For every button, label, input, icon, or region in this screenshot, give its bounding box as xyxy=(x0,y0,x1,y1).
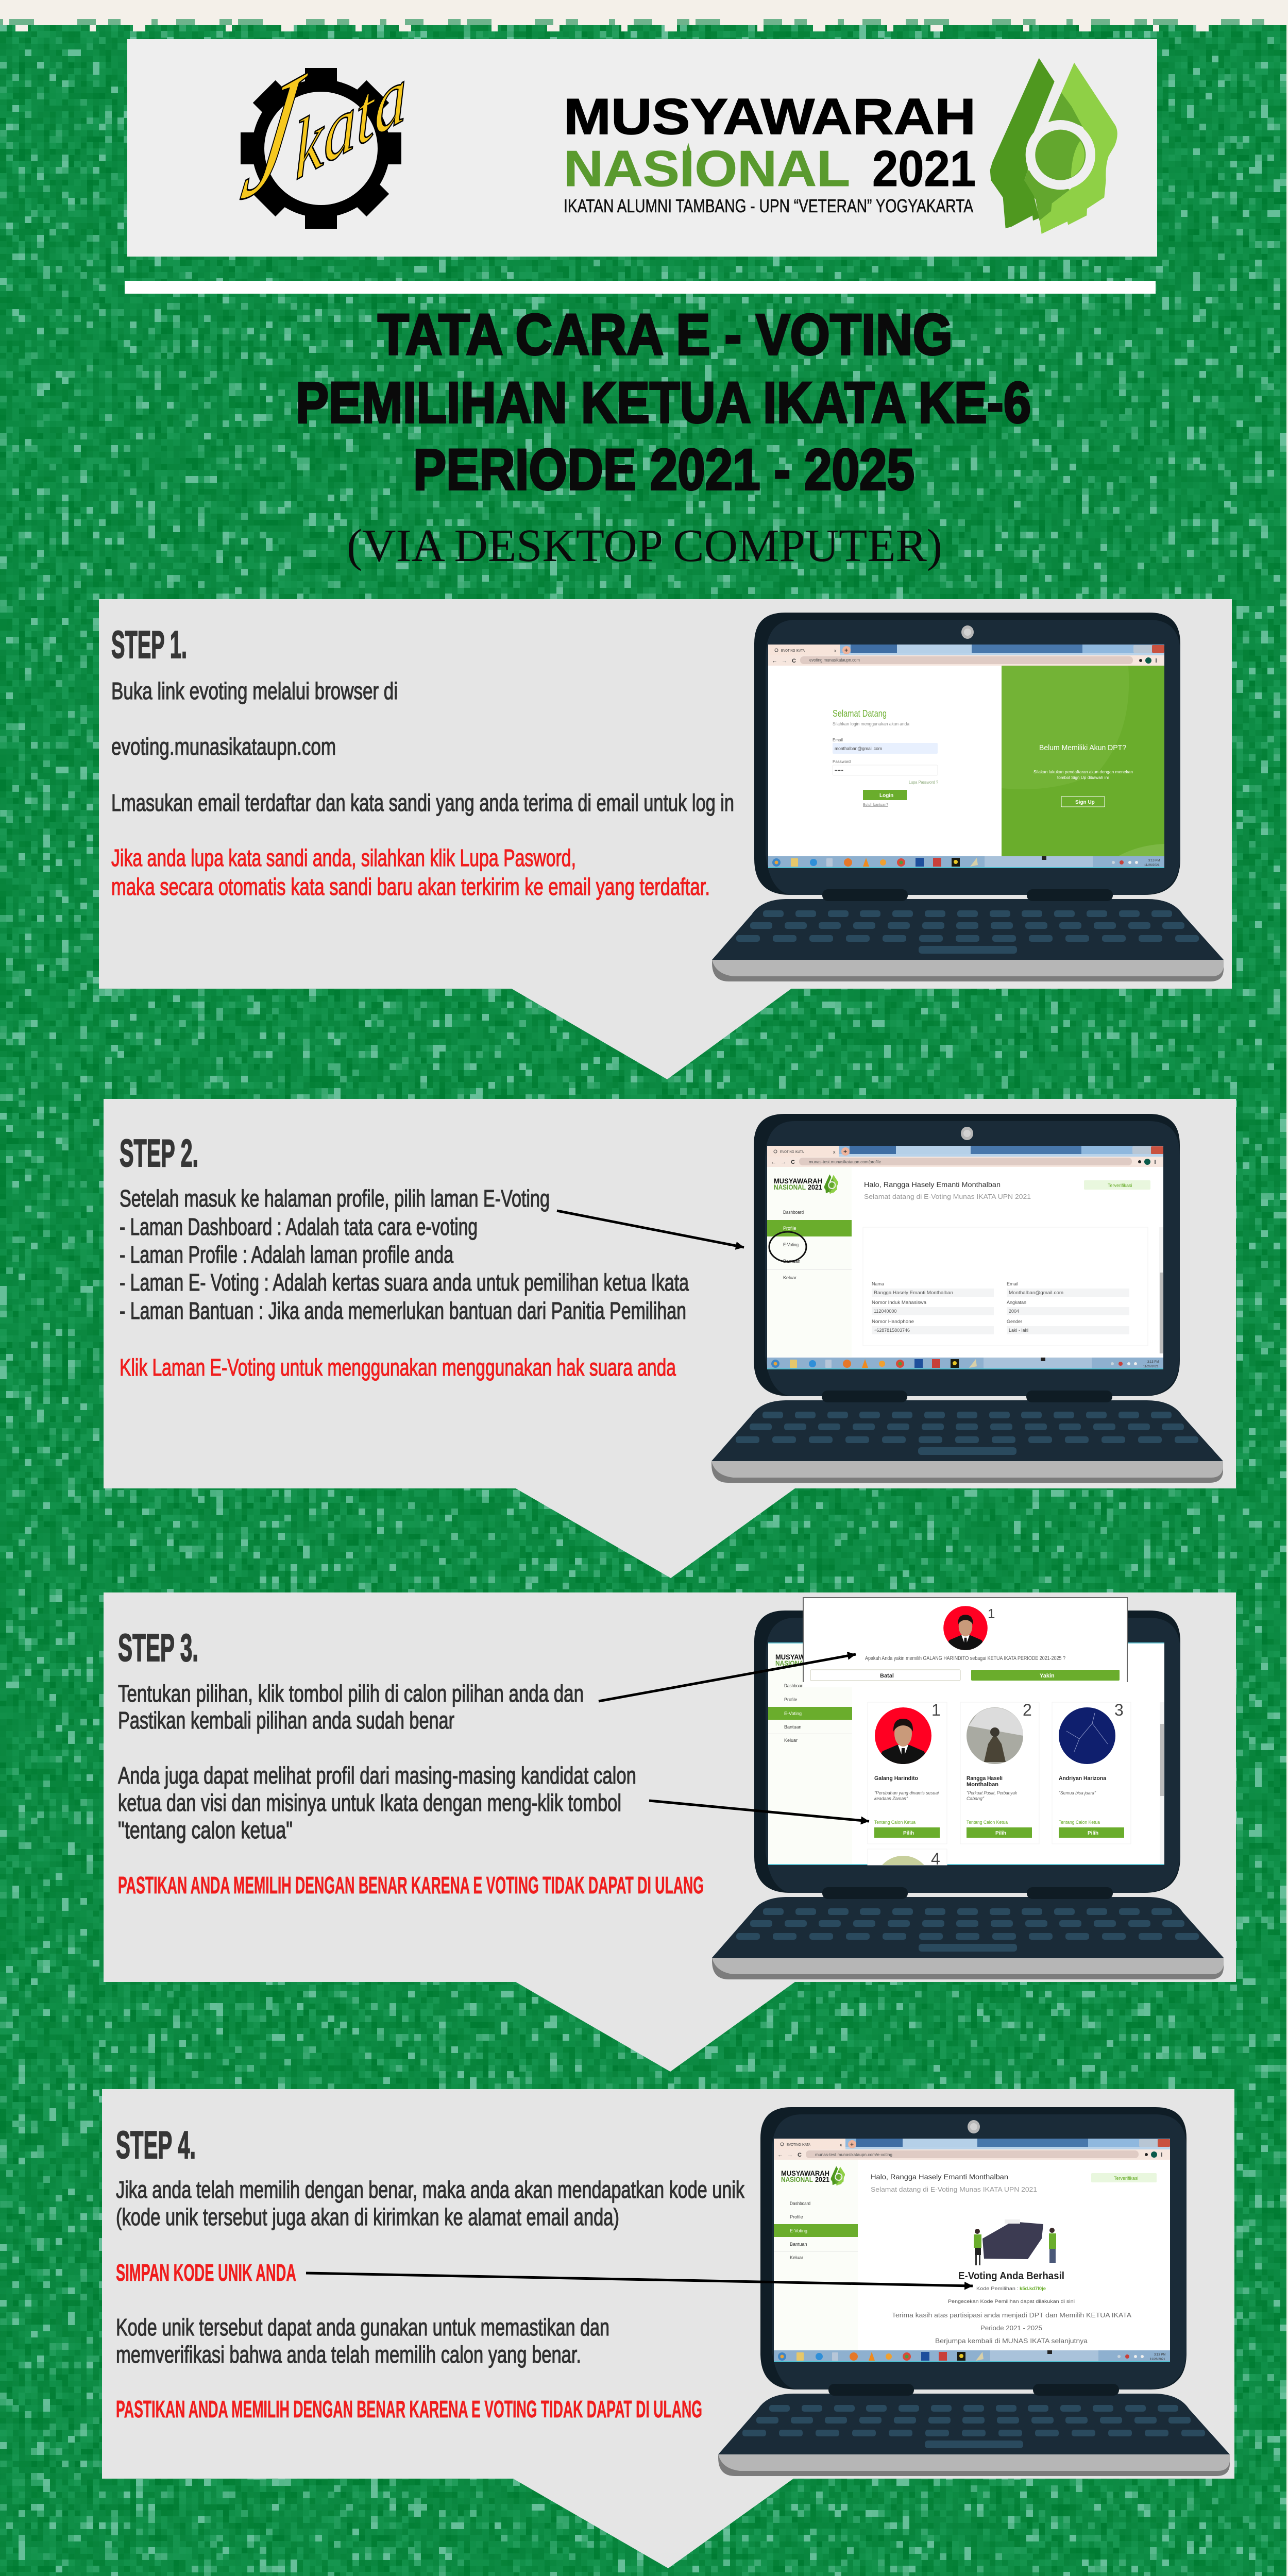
laptop: voting success screen: Selamat datang di E-Voting Munas IKATA UPN 2021 xyxy=(871,2185,1037,2193)
logo text: Musyawarah Nasional 2021: 2021 xyxy=(872,140,976,197)
logo: green number six xyxy=(990,58,1117,234)
laptop: voting success screen: 2021 xyxy=(815,2175,829,2183)
laptop: profile screen: Dashboard xyxy=(783,1210,804,1215)
laptop: profile screen: Email xyxy=(1007,1281,1019,1286)
laptop: profile screen: NASIONAL xyxy=(774,1183,806,1191)
candidate cards: Pilih xyxy=(995,1831,1006,1836)
laptop: login screen: Silahkan login menggunakan akun anda xyxy=(833,721,909,726)
candidate cards: Pilih xyxy=(1088,1831,1098,1836)
laptop: profile screen: MUSYAWARAH xyxy=(774,1177,822,1185)
laptop: profile screen: Bantuan xyxy=(783,1259,801,1264)
circle highlighting e-voting menu xyxy=(769,1232,806,1262)
laptop: candidate selection screen: Bantuan xyxy=(784,1724,802,1730)
candidate cards: Tentang Calon Ketua xyxy=(1059,1820,1100,1825)
step 1 warning: Jika anda lupa kata sandi anda, silahkan klik Lupa Pasword, xyxy=(111,844,576,871)
step 4 heading: STEP 4. xyxy=(116,2123,196,2166)
panel: step 1 xyxy=(99,599,1232,1079)
step 4 instructions xyxy=(116,2176,745,2230)
title: TATA CARA E - VOTING xyxy=(378,302,953,367)
laptop: login screen: Lupa Password ? xyxy=(909,780,938,785)
step 3 instructions: ketua dan visi dan misinya untuk Ikata dengan meng-klik tombol xyxy=(118,1789,621,1816)
code explanation: memverifikasi bahwa anda telah memilih calon yang benar. xyxy=(116,2341,581,2368)
logo: Ikata gear: kata xyxy=(294,46,408,198)
laptop: login screen: Login xyxy=(879,793,893,799)
candidate cards xyxy=(868,1702,1131,1865)
candidate cards: 1 xyxy=(931,1701,941,1719)
step 1 instructions xyxy=(111,677,734,816)
step 3 heading: STEP 3. xyxy=(118,1626,198,1669)
candidate cards: Tentang Calon Ketua xyxy=(874,1820,916,1825)
laptop: candidate selection screen xyxy=(712,1598,1224,1979)
laptop: profile screen: Nama xyxy=(872,1281,884,1286)
laptop: voting success screen: Profile xyxy=(790,2214,803,2219)
laptop: profile screen: 2021 xyxy=(808,1183,822,1191)
laptop: profile screen: munas-test.munasikataupn.com/profile xyxy=(809,1160,882,1164)
candidate cards: 4 xyxy=(931,1850,940,1868)
step 2 instructions: - Laman Profile : Adalah laman profile anda xyxy=(120,1241,453,1268)
laptop: profile screen: +6287815803746 xyxy=(874,1328,910,1333)
step 2 heading: STEP 2. xyxy=(120,1131,198,1175)
candidate cards: Rangga Haseli xyxy=(967,1775,1003,1782)
laptop: login screen: Butuh bantuan? xyxy=(863,803,888,807)
laptop: candidate selection screen: Dashboard xyxy=(784,1683,805,1688)
panel background with pointer xyxy=(104,1592,1236,2072)
laptop: profile screen: Nomor Induk Mahasiswa xyxy=(872,1300,926,1305)
logo text: Musyawarah Nasional 2021 xyxy=(564,88,976,216)
laptop: candidate selection screen: NASIONAL xyxy=(775,1659,807,1667)
step 2 instructions: Setelah masuk ke halaman profile, pilih laman E-Voting xyxy=(120,1185,550,1212)
laptop: login screen: Sign Up xyxy=(1075,800,1095,805)
step 3 warning: PASTIKAN ANDA MEMILIH DENGAN BENAR KARENA E VOTING TIDAK DAPAT DI ULANG xyxy=(118,1872,704,1899)
laptop: voting success screen: Terverifikasi xyxy=(1114,2176,1139,2181)
confirmation modal: Batal xyxy=(880,1673,894,1679)
step 1 instructions: Buka link evoting melalui browser di xyxy=(111,677,398,704)
candidate cards: "Perkuat Pusat, Perbanyak xyxy=(967,1790,1017,1795)
icon: ballot box illustration xyxy=(974,2219,1056,2265)
panel: step 3 xyxy=(104,1592,1236,2072)
panel: step 4 xyxy=(102,2089,1234,2568)
laptop: voting success screen: munas-test.munasikataupn.com/e-voting xyxy=(815,2153,892,2157)
laptop: profile screen: Terverifikasi xyxy=(1108,1183,1132,1188)
step 2 instructions xyxy=(120,1185,689,1324)
laptop: profile screen: Profile xyxy=(783,1226,796,1231)
logo: Ikata gear: J xyxy=(231,36,316,236)
step 1 warning: maka secara otomatis kata sandi baru akan terkirim ke email yang terdaftar. xyxy=(111,873,710,900)
laptop: voting success screen: Halo, Rangga Hasely Emanti Monthalban xyxy=(871,2173,1008,2181)
logo text: Musyawarah Nasional 2021: MUSYAWARAH xyxy=(564,88,976,145)
laptop: voting success screen: Pengecekan Kode Pemilihan dapat dilakukan di sini xyxy=(948,2299,1075,2304)
laptop: voting success screen: E-Voting xyxy=(790,2228,807,2233)
laptop: voting success screen: Dashboard xyxy=(790,2201,810,2206)
laptop: candidate selection screen: E-Voting xyxy=(784,1711,802,1716)
laptop: voting success screen xyxy=(718,2107,1230,2476)
candidate cards: Cabang" xyxy=(967,1796,985,1801)
panel: step 2 xyxy=(104,1099,1236,1578)
panel background with pointer xyxy=(99,599,1232,1079)
step 2 instructions: - Laman E- Voting : Adalah kertas suara anda untuk pemilihan ketua Ikata xyxy=(120,1269,689,1296)
step 3 instructions: Anda juga dapat melihat profil dari masing-masing kandidat calon xyxy=(118,1762,636,1789)
step 3 instructions: Tentukan pilihan, klik tombol pilih di calon pilihan anda dan xyxy=(118,1680,584,1707)
candidate cards: Pilih xyxy=(903,1831,914,1836)
step 1 heading: STEP 1. xyxy=(111,623,187,666)
laptop: profile screen: E-Voting xyxy=(783,1242,799,1247)
laptop: profile screen: Halo, Rangga Hasely Emanti Monthalban xyxy=(864,1180,1001,1189)
save code callout: SIMPAN KODE UNIK ANDA xyxy=(116,2259,296,2286)
step 4 instructions: (kode unik tersebut juga akan di kirimkan ke alamat email anda) xyxy=(116,2204,619,2230)
laptop: voting success screen: Kode Pemilihan : xyxy=(976,2286,1019,2291)
laptop: profile screen xyxy=(711,1114,1223,1483)
code explanation: Kode unik tersebut dapat anda gunakan untuk memastikan dan xyxy=(116,2314,609,2341)
title: PEMILIHAN KETUA IKATA KE-6 xyxy=(296,370,1031,435)
step 2 instructions: - Laman Dashboard : Adalah tata cara e-voting xyxy=(120,1213,478,1240)
header banner xyxy=(127,36,1157,257)
panel background with pointer xyxy=(104,1099,1236,1578)
confirmation modal: Apakah Anda yakin memilih GALANG HARINDITO sebagai KETUA IKATA PERIODE 2021-2025 ? xyxy=(865,1655,1065,1662)
step 1 instructions: evoting.munasikataupn.com xyxy=(111,733,336,760)
laptop: login screen: Password xyxy=(833,759,851,764)
laptop: profile screen: 2004 xyxy=(1009,1309,1019,1314)
candidate cards: Monthalban xyxy=(967,1782,998,1788)
panel background with pointer xyxy=(102,2089,1234,2568)
laptop: voting success screen: k5d.kd7l0je xyxy=(1020,2286,1046,2291)
confirmation modal: 1 xyxy=(988,1606,995,1621)
logo: Ikata gear xyxy=(231,36,408,236)
laptop: candidate selection screen: Keluar xyxy=(784,1738,798,1743)
laptop: candidate selection screen: MUSYAWARAH xyxy=(775,1653,824,1661)
laptop: profile screen: Rangga Hasely Emanti Monthalban xyxy=(874,1290,953,1295)
subtitle: (VIA DESKTOP COMPUTER) xyxy=(347,520,942,571)
laptop: voting success screen: Berjumpa kembali di MUNAS IKATA selanjutnya xyxy=(935,2337,1088,2345)
laptop: voting success screen: Keluar xyxy=(790,2255,803,2260)
step 3 instructions: "tentang calon ketua" xyxy=(118,1817,293,1843)
laptop: candidate selection screen: Profile xyxy=(784,1697,798,1702)
candidate cards: Tentang Calon Ketua xyxy=(967,1820,1008,1825)
candidate cards: 2 xyxy=(1023,1701,1032,1719)
laptop: profile screen: Selamat datang di E-Voting Munas IKATA UPN 2021 xyxy=(864,1193,1031,1200)
candidate cards: "Perubahan yang dinamis sesuai xyxy=(874,1790,939,1795)
laptop: profile screen: Monthalban@gmail.com xyxy=(1009,1290,1063,1295)
title xyxy=(296,302,1031,502)
code explanation xyxy=(116,2314,609,2368)
laptop: voting success screen: Periode 2021 - 2025 xyxy=(980,2324,1042,2332)
step 1 instructions: Lmasukan email terdaftar dan kata sandi yang anda terima di email untuk log in xyxy=(111,789,734,816)
confirmation modal xyxy=(803,1598,1128,1687)
laptop: login screen xyxy=(712,613,1224,981)
step 2 warning: Klik Laman E-Voting untuk menggunakan menggunakan hak suara anda xyxy=(120,1354,676,1381)
arrow to candidate link xyxy=(649,1801,869,1821)
laptop: login screen: Email xyxy=(833,738,843,742)
logo text: Musyawarah Nasional 2021: NASIONAL xyxy=(564,140,850,197)
arrow to modal question xyxy=(599,1654,856,1701)
arrow to unique code xyxy=(306,2273,973,2286)
white divider top xyxy=(125,281,1156,294)
laptop: login screen: Belum Memiliki Akun DPT? xyxy=(1039,743,1126,752)
candidate cards: Andriyan Harizona xyxy=(1059,1775,1107,1782)
laptop: login screen: Silakan lakukan pendaftaran akun dengan menekan xyxy=(1033,770,1133,774)
laptop: login screen: monthalban@gmail.com xyxy=(835,746,882,751)
confirmation modal: Yakin xyxy=(1040,1673,1055,1679)
laptop: voting success screen: Bantuan xyxy=(790,2242,807,2247)
candidate cards: keadaan Zaman" xyxy=(874,1796,908,1801)
step 3 instructions xyxy=(118,1680,636,1843)
laptop: profile screen: Angkatan xyxy=(1007,1300,1026,1305)
candidate cards: 3 xyxy=(1114,1701,1124,1719)
candidate cards: "Semua bisa juara" xyxy=(1059,1790,1096,1795)
laptop: profile screen: 112040000 xyxy=(874,1309,896,1314)
laptop: profile screen: Nomor Handphone xyxy=(872,1319,914,1324)
candidate cards: Galang Harindito xyxy=(874,1775,918,1782)
laptop: profile screen: Gender xyxy=(1007,1319,1022,1324)
laptop: voting success screen: Terima kasih atas partisipasi anda menjadi DPT dan Memilih KETUA IKATA xyxy=(892,2311,1131,2319)
laptop: profile screen: Laki - laki xyxy=(1009,1328,1028,1333)
laptop: login screen: •••••• xyxy=(835,768,843,773)
step 3 instructions: Pastikan kembali pilihan anda sudah benar xyxy=(118,1707,454,1734)
laptop: voting success screen: NASIONAL xyxy=(781,2175,813,2183)
logo text: Musyawarah Nasional 2021: IKATAN ALUMNI TAMBANG - UPN “VETERAN” YOGYAKARTA xyxy=(564,195,973,216)
step 4 instructions: Jika anda telah memilih dengan benar, maka anda akan mendapatkan kode unik xyxy=(116,2176,745,2203)
laptop: login screen: Selamat Datang xyxy=(833,708,887,719)
laptop: voting success screen: E-Voting Anda Berhasil xyxy=(958,2270,1064,2282)
title: PERIODE 2021 - 2025 xyxy=(413,437,914,502)
laptop: login screen: tombol Sign Up dibawah ini xyxy=(1057,775,1109,780)
laptop: login screen: evoting.munasikataupn.com xyxy=(809,657,860,663)
step 2 instructions: - Laman Bantuan : Jika anda memerlukan bantuan dari Panitia Pemilihan xyxy=(120,1297,686,1324)
arrow to e-voting menu xyxy=(557,1211,744,1247)
step 4 warning: PASTIKAN ANDA MEMILIH DENGAN BENAR KARENA E VOTING TIDAK DAPAT DI ULANG xyxy=(116,2396,702,2422)
top cream margin xyxy=(0,0,1288,25)
step 1 warning xyxy=(111,844,710,900)
laptop: profile screen: Keluar xyxy=(783,1275,796,1280)
laptop: voting success screen: MUSYAWARAH xyxy=(781,2169,829,2177)
